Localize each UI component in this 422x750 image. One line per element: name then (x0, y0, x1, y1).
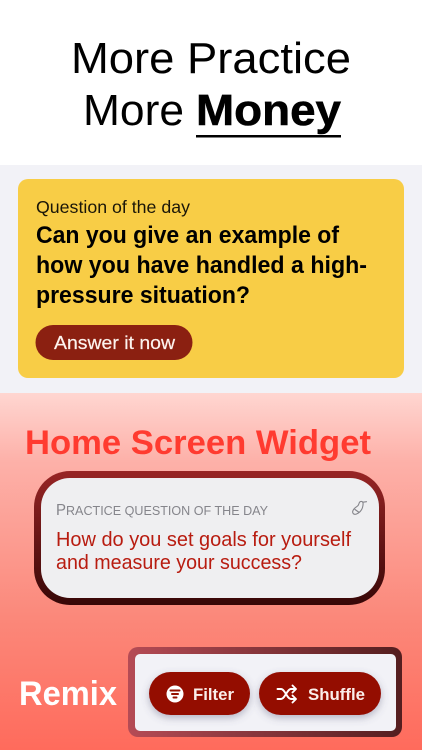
icon: bird (353, 501, 366, 514)
panel: remix controls (128, 647, 402, 737)
widget label: PRACTICE QUESTION OF THE DAY (56, 502, 268, 519)
title: More Practice (71, 34, 351, 83)
label: question of the day: Question of the day (36, 197, 190, 217)
button: filter (149, 672, 250, 715)
title: More (83, 86, 184, 135)
heading: remix: Remix (19, 675, 117, 713)
button: shuffle: Shuffle (308, 686, 365, 704)
button: answer it now: Answer it now (54, 332, 176, 353)
question text: pressure situation? (36, 282, 250, 309)
button: shuffle (259, 672, 381, 715)
question text: how you have handled a high- (36, 252, 367, 279)
icon: shuffle (278, 686, 296, 702)
question text (36, 222, 367, 309)
panel: pink gradient background (0, 393, 422, 750)
panel: question of the day band (0, 165, 422, 393)
button: filter: Filter (193, 686, 235, 704)
panel: widget (34, 471, 385, 605)
panel: question card (18, 179, 404, 378)
title (71, 34, 351, 138)
heading: home screen widget: Home Screen Widget (25, 424, 371, 462)
widget question (56, 528, 351, 574)
icon: filter (166, 686, 184, 702)
button: answer it now (36, 325, 192, 360)
widget question: How do you set goals for yourself (56, 528, 351, 551)
title: Money (196, 86, 342, 135)
question text: Can you give an example of (36, 222, 340, 249)
widget question: and measure your success? (56, 551, 302, 574)
